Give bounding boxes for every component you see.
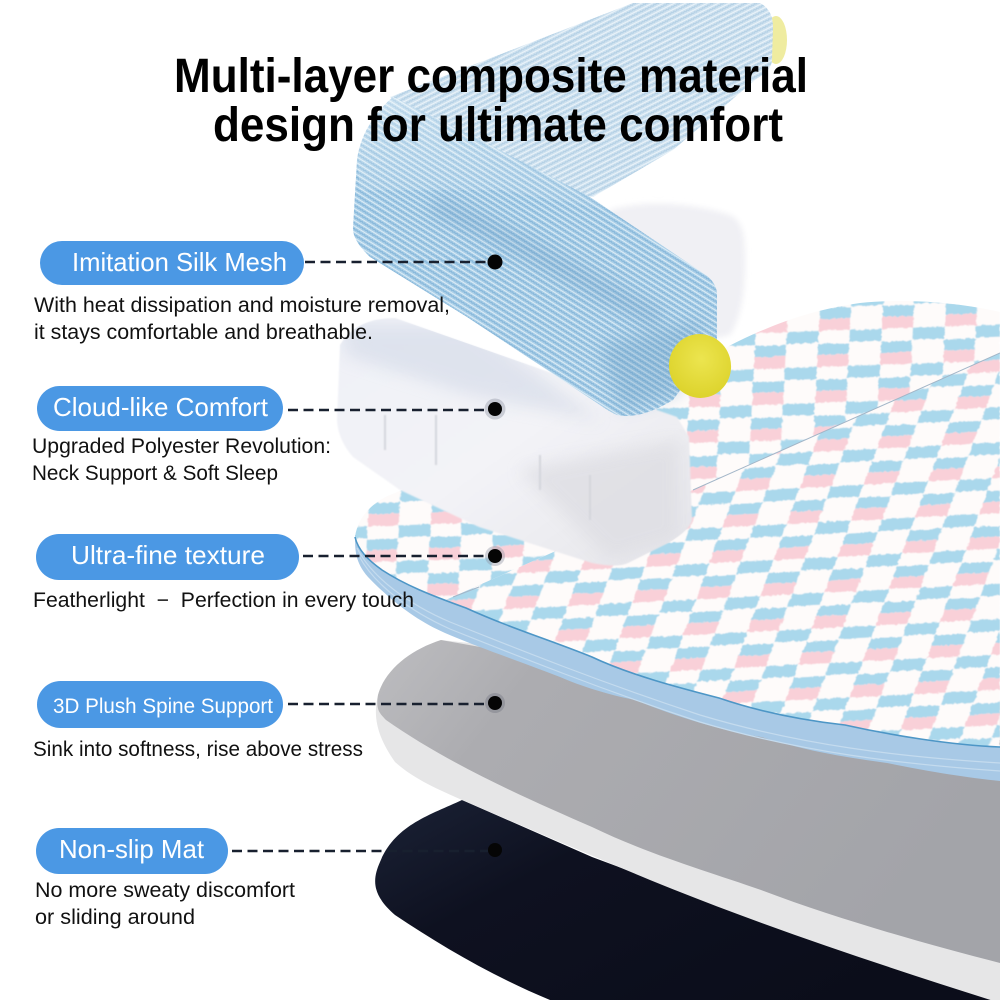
label pill [36, 828, 228, 874]
mesh shading [357, 97, 705, 410]
description: Sink into softness, rise above stress [33, 738, 363, 761]
description: Upgraded Polyester Revolution: [32, 435, 331, 458]
back yellow end cap [765, 16, 787, 64]
layer: black non-slip mat [375, 800, 1000, 1000]
title line 1: Multi-layer composite material [174, 50, 808, 103]
label text: Ultra-fine texture [71, 540, 265, 570]
leader dot [488, 254, 502, 270]
cushion side band [376, 640, 1000, 1000]
checker area below seam [446, 354, 1000, 746]
pad side edge [355, 535, 1000, 781]
pad edge lines [357, 548, 1000, 771]
title line 2: design for ultimate comfort [213, 99, 783, 152]
title [174, 50, 808, 152]
label pill [37, 681, 283, 728]
leader dot [488, 843, 502, 857]
leader dot [485, 546, 505, 566]
label text: Imitation Silk Mesh [72, 247, 287, 277]
description: No more sweaty discomfort [35, 879, 295, 902]
cushion top surface [377, 640, 1000, 963]
leader dot [485, 693, 505, 713]
pad top edge highlight [355, 537, 1000, 747]
back mesh body [390, 3, 773, 197]
label text: Cloud-like Comfort [53, 392, 269, 422]
description: Featherlight − Perfection in every touch [33, 589, 414, 612]
leader line [232, 850, 488, 852]
description: Neck Support & Soft Sleep [32, 462, 278, 485]
layer: white 3D plush cushion [376, 640, 1000, 1000]
leader line [288, 703, 488, 705]
callout: Ultra-fine texture [33, 534, 505, 612]
callout: Cloud-like Comfort [32, 386, 506, 485]
layer: back foam block [600, 204, 745, 345]
label text: Non-slip Mat [59, 834, 205, 864]
description: With heat dissipation and moisture removal, [34, 294, 450, 317]
leader line [288, 409, 488, 411]
product illustration: exploded pillow layers [337, 3, 1000, 1000]
label pill [37, 386, 283, 431]
leader line [303, 555, 488, 557]
description: it stays comfortable and breathable. [34, 321, 373, 344]
leader dot [484, 398, 506, 420]
pad top checker surface [340, 290, 1000, 760]
pad fabric seam [453, 353, 1000, 597]
layer: front foam block [337, 318, 692, 566]
foam body [337, 318, 692, 566]
label pill [40, 241, 304, 285]
callout: Imitation Silk Mesh [34, 241, 502, 344]
layer: checker fabric pad [340, 290, 1000, 781]
mesh body [353, 97, 717, 416]
callout: Non-slip Mat [35, 828, 502, 929]
leader line [305, 261, 488, 263]
foam shading [345, 325, 680, 560]
label pill [36, 534, 299, 580]
checker area above seam [355, 301, 1000, 600]
layer: front mesh pillow [353, 97, 738, 416]
label text: 3D Plush Spine Support [53, 695, 273, 718]
layer: back mesh pillow [390, 3, 787, 197]
yellow end cap [662, 327, 738, 405]
description: or sliding around [35, 906, 195, 929]
callout: 3D Plush Spine Support [33, 681, 505, 761]
